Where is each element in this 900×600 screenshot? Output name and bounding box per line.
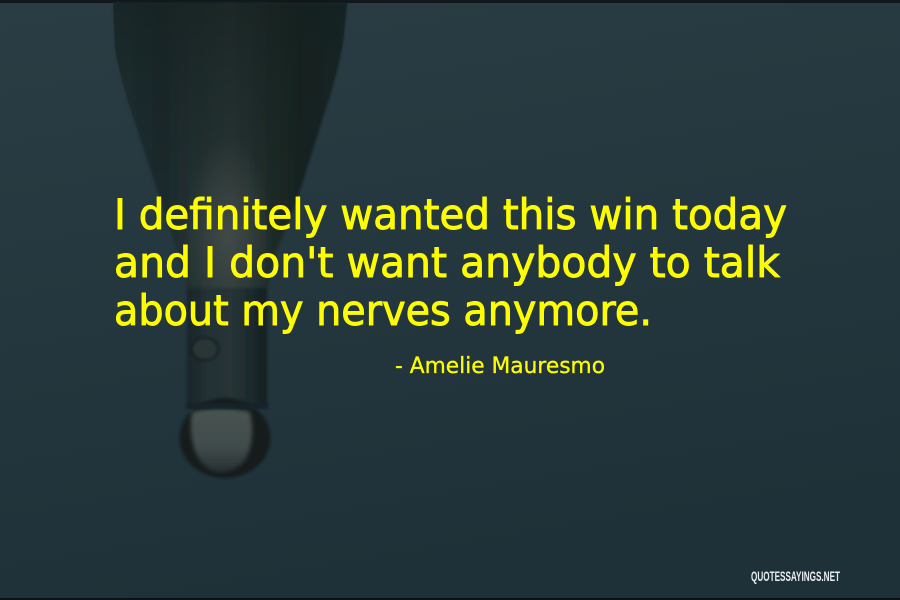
quote text (114, 190, 787, 335)
bottle body (113, 3, 347, 290)
attribution: - Amelie Mauresmo (395, 354, 605, 379)
bottom edge strip (0, 598, 900, 600)
drop highlight (191, 408, 252, 472)
quote line 1: I definitely wanted this win today (114, 190, 787, 239)
bottle collar line (186, 403, 268, 409)
bottle centre glow (196, 166, 261, 288)
air bubble (192, 338, 218, 360)
quote line 3: about my nerves anymore. (114, 286, 652, 335)
drop at bottle tip (180, 398, 270, 478)
watermark: QUOTESSAYINGS.NET (751, 568, 840, 584)
quote line 2: and I don't want anybody to talk (114, 238, 781, 287)
top edge strip (0, 0, 900, 3)
bottle top shade (113, 3, 347, 126)
bottle neck (187, 288, 267, 406)
illustration: glass bottle with drop (100, 3, 360, 478)
